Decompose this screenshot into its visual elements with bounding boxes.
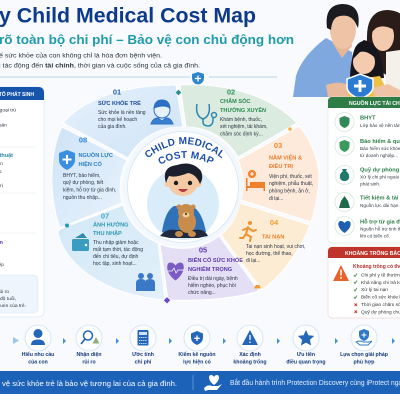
segment 07: income impact: mất tạm thời, tác động <box>93 247 143 253</box>
segment 07: income impact: THU NHẬP <box>93 230 122 237</box>
segment 05: serious health events: Điều trị dài ngày, bệnh <box>188 276 238 282</box>
panel: financial resources (right) <box>328 97 400 243</box>
icon: running person <box>240 221 256 241</box>
step: understand needs <box>22 325 54 366</box>
resource: family support <box>335 216 400 238</box>
segment 05: serious health events: hiểm nghèo, phục hồi <box>188 282 236 289</box>
resource: family support: khi có biến cố. <box>360 234 390 238</box>
segment 02: regular care <box>180 85 297 157</box>
step: find gaps <box>233 325 267 366</box>
step: check resources <box>178 325 216 366</box>
segment 03: hospital and treatment: nghiệm, phẫu thuật, <box>269 180 313 187</box>
icon: family shield <box>347 74 373 99</box>
icon: two people <box>136 273 155 291</box>
segment 01: child health: của gia đình. <box>98 123 127 130</box>
arrows <box>13 337 395 344</box>
segment 04: accidents: học đường, thể thao, <box>246 250 293 257</box>
segment 07: income impact: Thu nhập giảm hoặc <box>93 240 139 246</box>
segment 08: available resources: kiệm, hỗ trợ từ gia đình, <box>63 186 116 194</box>
segment 07: income impact <box>58 205 165 300</box>
icon: stethoscope <box>197 104 216 126</box>
child illustration <box>147 163 219 240</box>
segment 01: child health: SỨC KHỎE TRẺ <box>98 100 141 107</box>
gap checklist: Xử lý tai nạn <box>361 286 388 293</box>
step: prioritize <box>286 325 326 366</box>
step: choose solution <box>340 325 388 366</box>
center title curved: CHILD MEDICAL <box>145 137 223 158</box>
segment 03: hospital and treatment: phòng bệnh, ăn ở, <box>269 188 310 194</box>
segment 03: hospital and treatment: ĐIỀU TRỊ <box>269 163 293 170</box>
gap checklist <box>354 272 400 316</box>
teddy bear <box>175 204 196 237</box>
center circle <box>127 127 243 243</box>
step: estimate costs: chi phí <box>135 360 152 366</box>
family photo <box>293 4 400 99</box>
step: understand needs: của con <box>28 360 48 366</box>
segment 07: income impact: ẢNH HƯỞNG <box>93 222 129 228</box>
icon: warning triangle <box>333 265 349 281</box>
segment 08: available resources <box>52 127 127 228</box>
segment 02: regular care: Khám bệnh, thuốc, <box>220 117 262 123</box>
segment 02: regular care: chăm sóc định kỳ... <box>220 132 263 138</box>
step: check resources: Kiểm kê nguồn <box>178 351 216 358</box>
segment 03: hospital and treatment: 03 <box>274 141 282 150</box>
segment 01: child health: Sức khỏe là nền tảng <box>98 109 146 116</box>
step: choose solution: phù hợp <box>354 360 374 366</box>
segment 03: hospital and treatment: Viện phí, thuốc, xét <box>269 174 312 180</box>
icon: purple heart <box>167 262 184 280</box>
icon: shield <box>59 150 75 170</box>
segment 08: available resources: NGUỒN LỰC <box>78 152 113 159</box>
segment 04: accidents <box>221 203 310 290</box>
title: y Child Medical Cost Map <box>0 4 256 28</box>
segment 01: child health: cho mọi kế hoạch <box>98 117 137 123</box>
shield plus <box>354 80 366 92</box>
segment 04: accidents: Tai nạn sinh hoạt, vui chơi, <box>246 244 305 250</box>
process steps <box>13 325 395 366</box>
segment 07: income impact: 07 <box>101 212 109 220</box>
panel: protection gap <box>328 247 400 318</box>
segment 08: available resources: quỹ dự phòng, tiết <box>63 180 104 186</box>
segment 02: regular care: CHĂM SÓC <box>220 97 250 105</box>
resource: reserve fund: phát sinh. <box>360 182 380 186</box>
segment 05: serious health events: BIẾN CỐ SỨC KHỎE <box>188 257 243 264</box>
segment 04: accidents: đi lại... <box>246 258 260 264</box>
segment 05: serious health events: NGHIÊM TRỌNG <box>188 265 232 273</box>
step: check resources: lực hiện có <box>183 360 211 366</box>
segment 02: regular care: xét nghiệm, tái khám, <box>220 124 268 130</box>
segment markers <box>65 90 292 304</box>
intro text: i tác động đến tài chính , thời gian và cuộc sống của cả gia đình. <box>0 62 200 70</box>
step: estimate costs <box>130 325 156 366</box>
subtitle: rõ toàn bộ chi phí – Bảo vệ con chủ động hơn <box>0 32 294 47</box>
icon: boy face <box>151 100 173 124</box>
step: find gaps: khoảng trống <box>233 358 267 366</box>
intro text: ế sức khỏe của con không chỉ là hóa đơn bệnh viện. <box>0 52 162 60</box>
divider with shield icon <box>0 72 277 85</box>
resource: insurance <box>335 136 400 158</box>
step: understand needs: Hiểu nhu cầu <box>22 351 54 358</box>
segment 05: serious health events: 05 <box>199 246 207 254</box>
icon: wallet <box>72 233 89 251</box>
segment 07: income impact: đến chi tiêu, dự định <box>93 254 139 260</box>
segment 08: available resources: nguồn thu nhập... <box>63 195 102 201</box>
icon: hospital bed <box>246 170 265 191</box>
step: estimate costs: Ước tính <box>132 352 154 358</box>
segment 05: serious health events: chức năng... <box>188 290 216 296</box>
segment 01: child health <box>63 85 183 158</box>
intro text <box>0 52 200 70</box>
step: identify risks: rủi ro <box>82 360 96 366</box>
resource: reserve fund <box>335 166 400 186</box>
panel: cost factors (left) <box>0 87 44 317</box>
resource: BHYT <box>335 112 400 132</box>
segment 08: available resources: HIỆN CÓ <box>78 160 102 168</box>
resource: BHYT: BHYT <box>360 116 376 122</box>
step: prioritize: điều quan trọng <box>286 360 326 366</box>
step: identify risks: Nhận diện <box>76 352 102 358</box>
resource: savings <box>335 192 400 212</box>
segment 08: available resources: BHYT, bảo hiểm, <box>63 172 101 179</box>
segment 01: child health: 01 <box>113 88 121 96</box>
segment 02: regular care: THƯỜNG XUYÊN <box>220 106 266 114</box>
segment 03: hospital and treatment: NẰM VIỆN & <box>269 154 302 162</box>
resource: reserve fund: Quỹ dự phòng <box>360 168 400 174</box>
segment 03: hospital and treatment <box>238 126 319 222</box>
step: prioritize: Ưu tiên <box>297 352 315 358</box>
segment 04: accidents: TAI NẠN <box>262 234 284 240</box>
segment 07: income impact: học tập, sinh hoạt... <box>93 261 137 267</box>
bottom banner: vệ sức khỏe trẻ là bảo vệ tương lai của cả gia đình. <box>2 380 177 388</box>
segment 05: serious health events <box>160 236 259 300</box>
segment 04: accidents: 04 <box>270 218 279 227</box>
step: identify risks <box>76 325 102 366</box>
center title curved: COST MAP <box>158 151 214 164</box>
step: choose solution: Lựa chọn giải pháp <box>340 352 388 358</box>
segment 02: regular care: 02 <box>227 88 235 96</box>
icon: hand and heart <box>204 375 222 391</box>
segment 08: available resources: 08 <box>79 136 87 144</box>
segment 03: hospital and treatment: đi lại... <box>269 196 283 202</box>
resource: insurance: từ doanh nghiệp... <box>360 153 398 158</box>
step: find gaps: Xác định <box>239 352 261 358</box>
bottom banner <box>0 371 400 394</box>
